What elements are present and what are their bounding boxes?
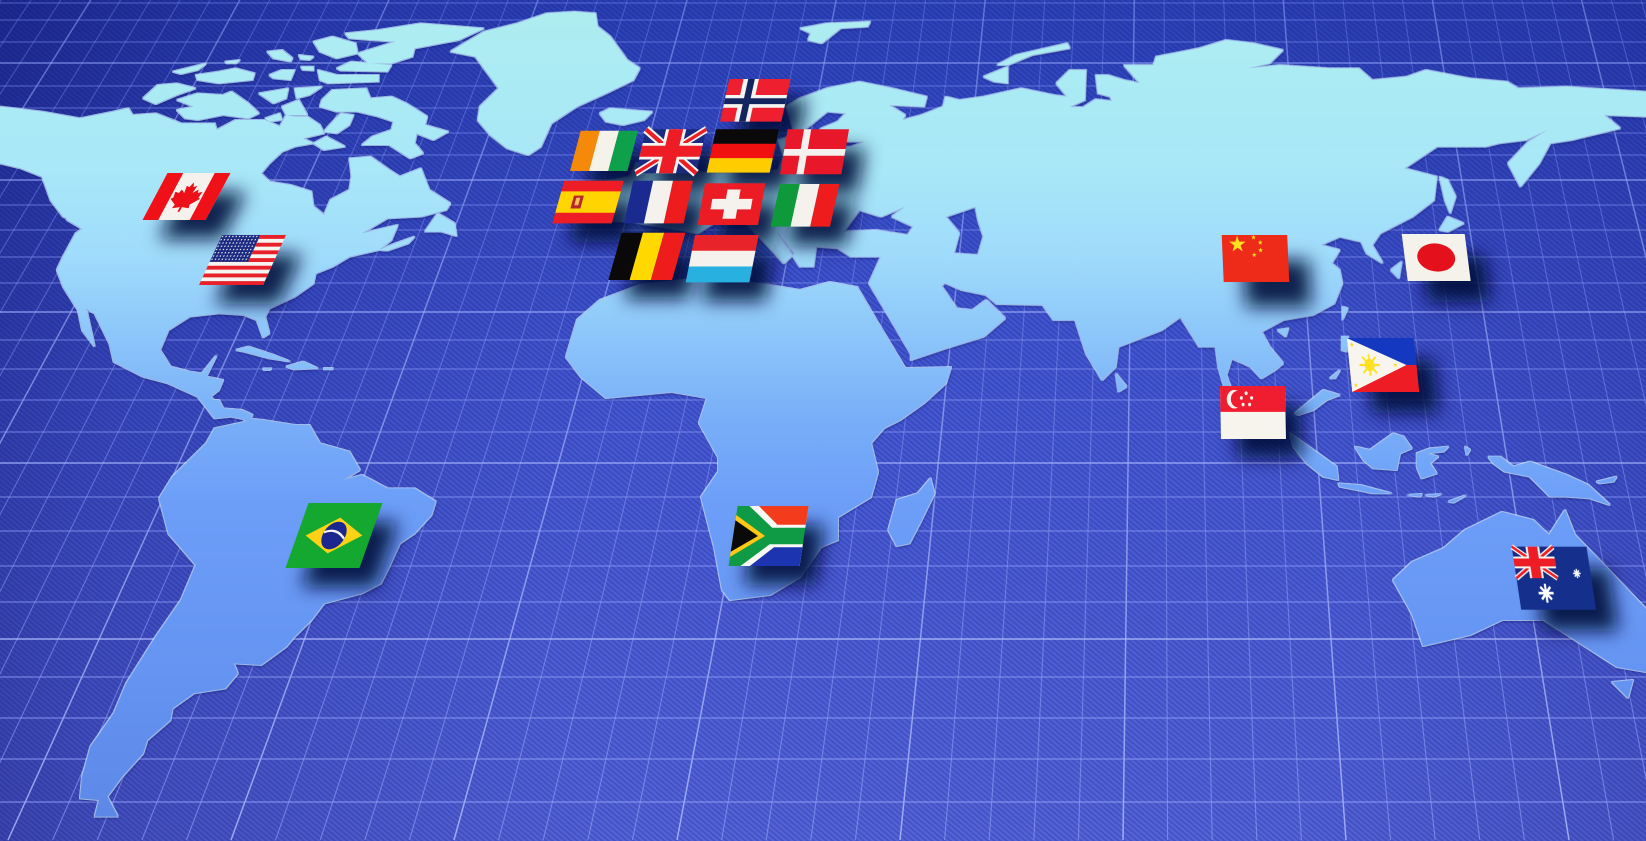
flag: Belgium [608, 233, 685, 280]
flag: Japan [1402, 234, 1471, 281]
landmass: Madagascar [888, 478, 935, 546]
flag: South Africa [729, 506, 809, 566]
flag: Australia [1512, 547, 1596, 610]
flag: United States [199, 235, 286, 285]
flag: Italy [771, 184, 839, 227]
flag: Denmark [780, 129, 849, 174]
landmass: Southeast Asia islands [1290, 337, 1617, 505]
landmass: North America and Arctic islands [0, 23, 484, 420]
flag: Norway [720, 79, 791, 122]
flag: Ivory Coast [570, 131, 638, 171]
flag: United Kingdom [636, 129, 706, 173]
landmass: South America [80, 400, 436, 817]
flag: France [624, 181, 693, 223]
flag: Singapore [1220, 386, 1286, 439]
flag: Spain [552, 181, 624, 223]
landmass: Eurasia [564, 22, 1646, 392]
flag: Brazil [286, 503, 382, 568]
flag: Luxembourg [686, 235, 759, 282]
landmass: Australia and Tasmania [1393, 510, 1646, 698]
flag: China [1222, 235, 1289, 282]
landmass: Greenland and Iceland [450, 12, 652, 155]
flag: Switzerland [698, 183, 765, 225]
flag: Philippines [1347, 338, 1419, 392]
landmass: Africa [566, 278, 951, 600]
flag: Germany [707, 129, 779, 173]
flag: Canada [142, 173, 230, 220]
flag drop shadows [158, 98, 1618, 631]
